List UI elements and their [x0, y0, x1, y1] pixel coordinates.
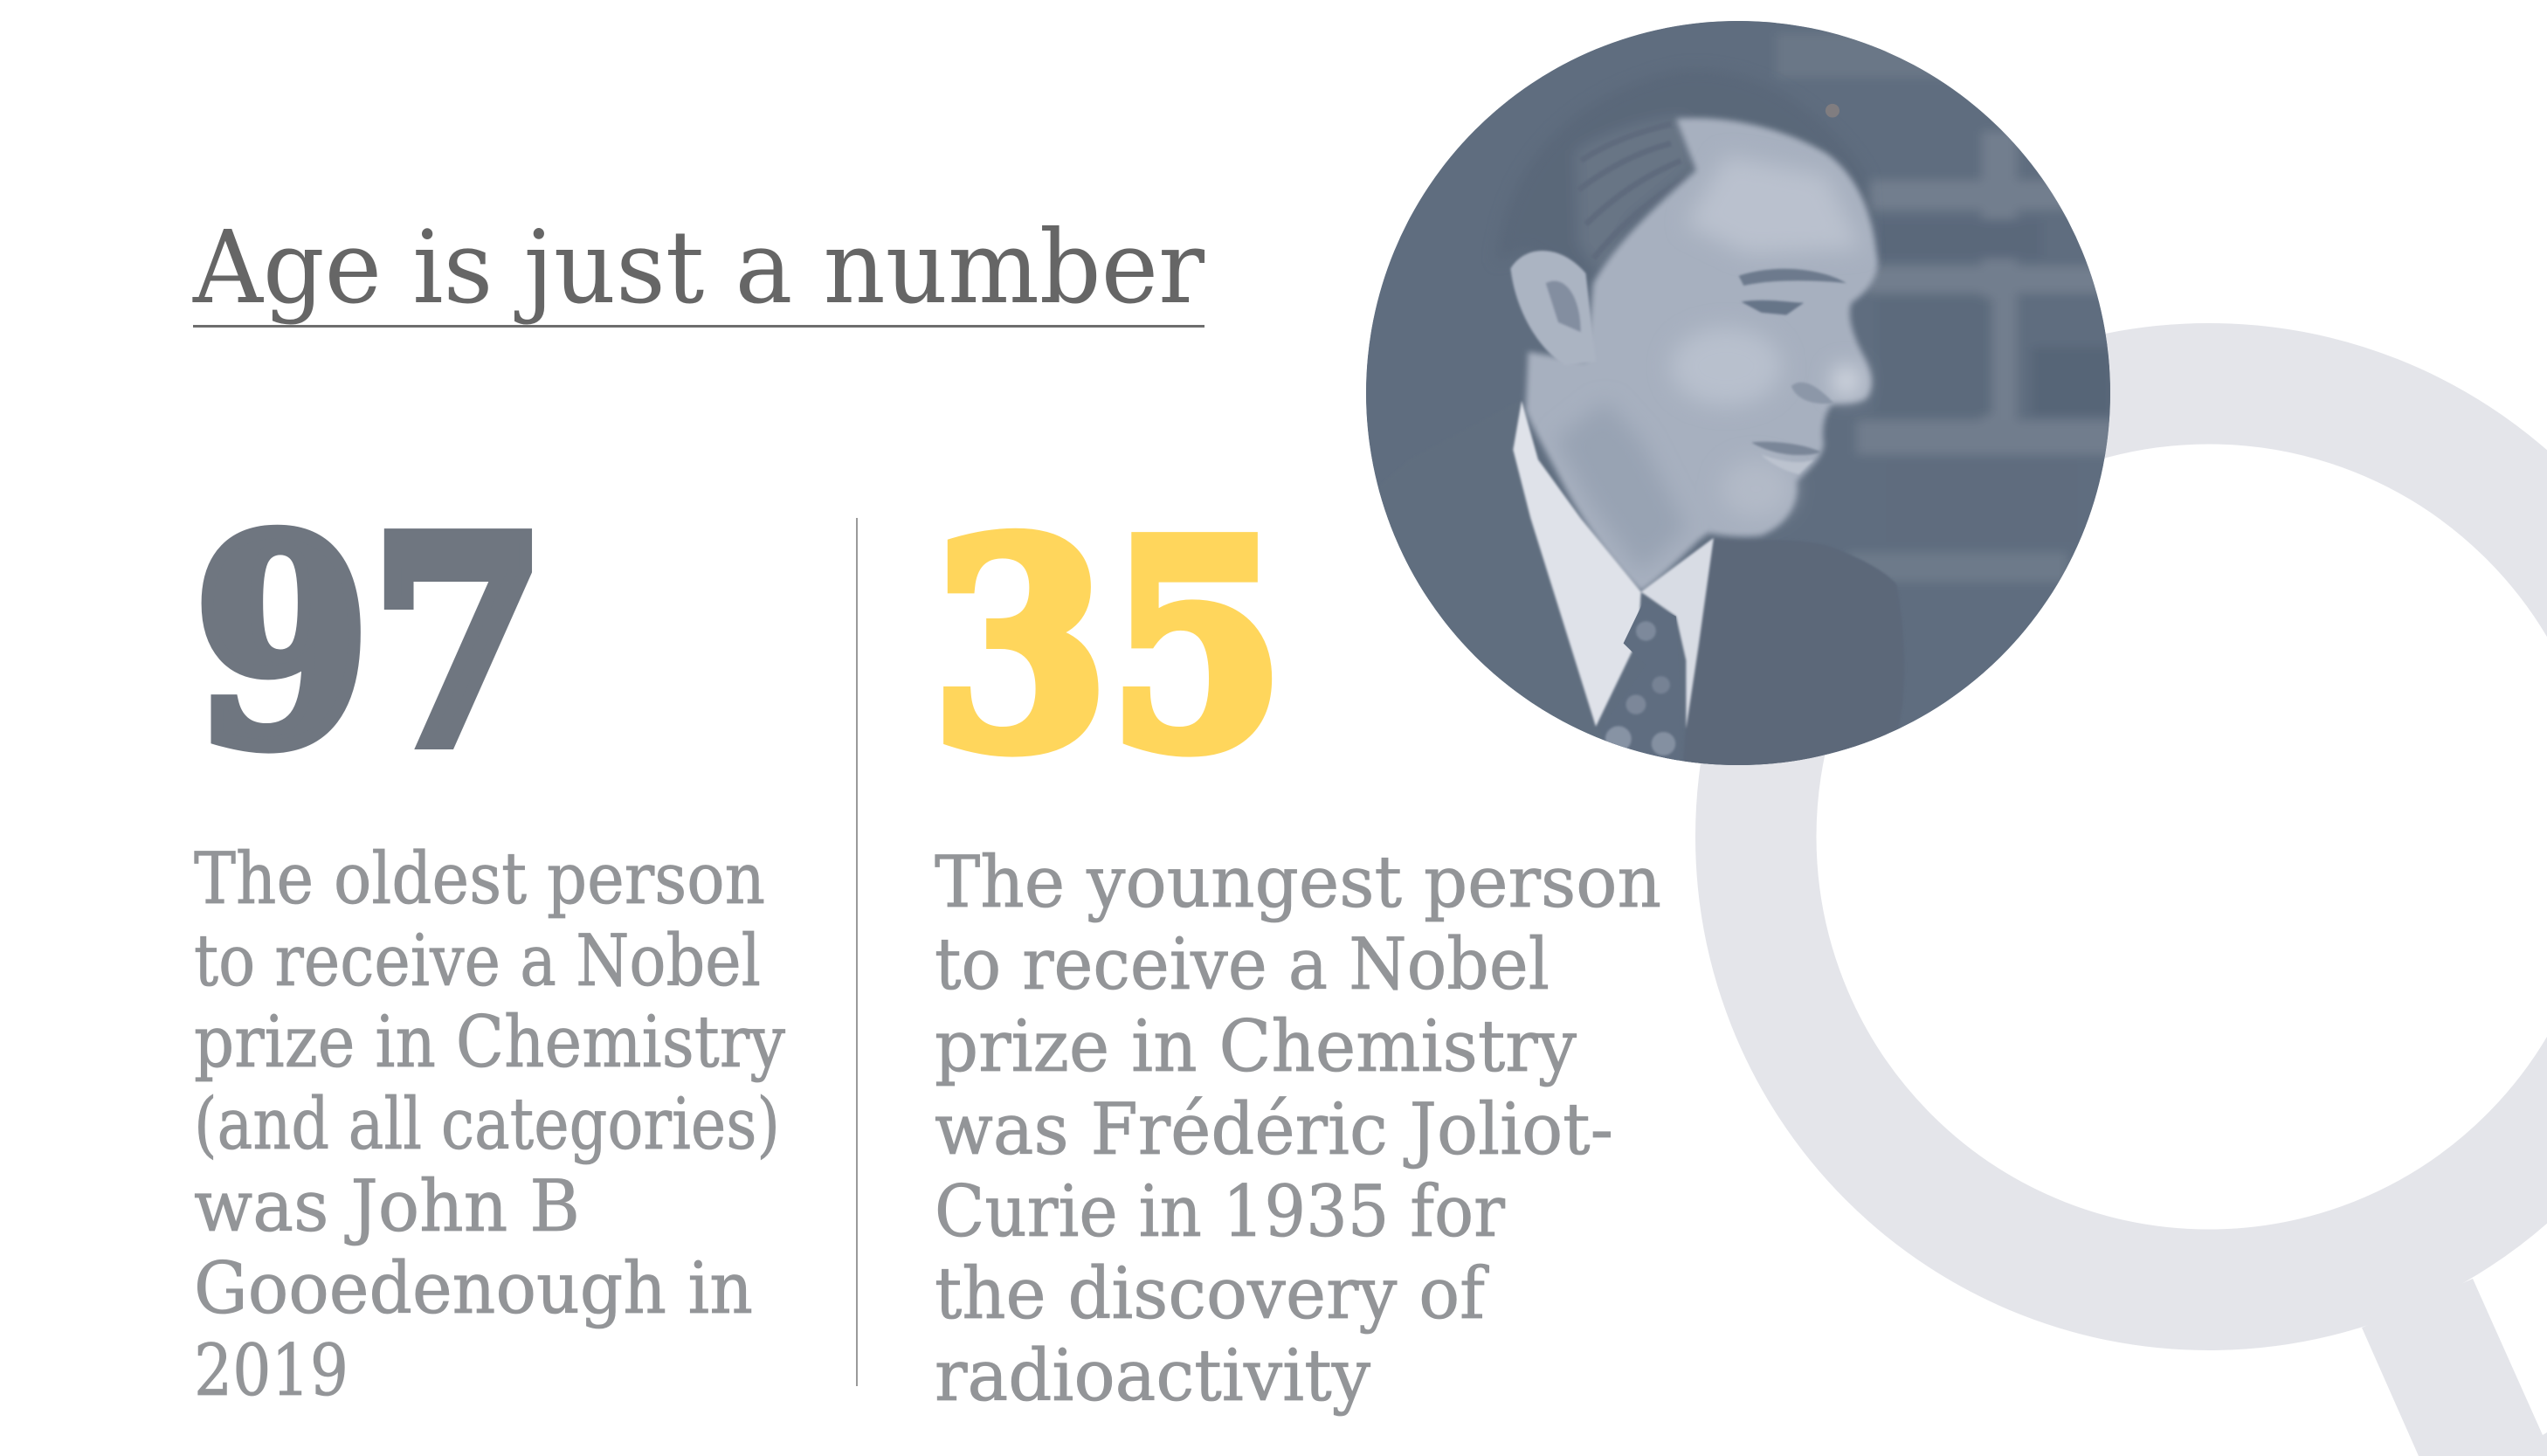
specks on photo [1826, 104, 1840, 118]
hair strands [1583, 126, 1681, 258]
title: Age is just a number [192, 210, 1204, 327]
jacket [1378, 487, 1899, 765]
text block: oldest laureate: Gooedenough in [194, 1248, 753, 1330]
text block: oldest laureate: prize in Chemistry [194, 1002, 785, 1084]
text block: oldest laureate: The oldest person [194, 838, 765, 921]
text block: youngest laureate: was Frédéric Joliot- [935, 1089, 1613, 1171]
text block: youngest laureate [935, 842, 1661, 1418]
magnifying glass backdrop [1756, 383, 2547, 1456]
hair [1586, 128, 1869, 250]
column divider [856, 518, 858, 1386]
stat: 97: 97 [194, 476, 547, 810]
text block: oldest laureate: was John B [194, 1166, 580, 1248]
eye, brow and mouth [1739, 269, 1846, 474]
title underline [193, 325, 1204, 328]
text block: oldest laureate [194, 838, 785, 1412]
text block: oldest laureate: 2019 [194, 1330, 349, 1412]
stat: 35: 35 [932, 480, 1285, 813]
magnifier handle [2362, 1279, 2547, 1456]
shirt collar [1513, 401, 1714, 729]
brick wall background [1366, 21, 2110, 765]
text block: youngest laureate: prize in Chemistry [935, 1006, 1577, 1088]
text block: youngest laureate: Curie in 1935 for [935, 1171, 1505, 1253]
face and neck [1526, 118, 1878, 592]
text block: youngest laureate: The youngest person [935, 842, 1661, 924]
text block: oldest laureate: (and all categories) [194, 1084, 780, 1166]
magnifier ring [1756, 383, 2547, 1290]
text block: youngest laureate: to receive a Nobel [935, 924, 1550, 1006]
portrait photo: Frédéric Joliot-Curie [1366, 21, 2110, 765]
text block: youngest laureate: the discovery of [935, 1253, 1489, 1335]
ear [1510, 251, 1596, 365]
text block: oldest laureate: to receive a Nobel [194, 921, 761, 1003]
text block: youngest laureate: radioactivity [935, 1335, 1370, 1418]
face shading [1556, 155, 1861, 572]
necktie [1602, 606, 1679, 761]
